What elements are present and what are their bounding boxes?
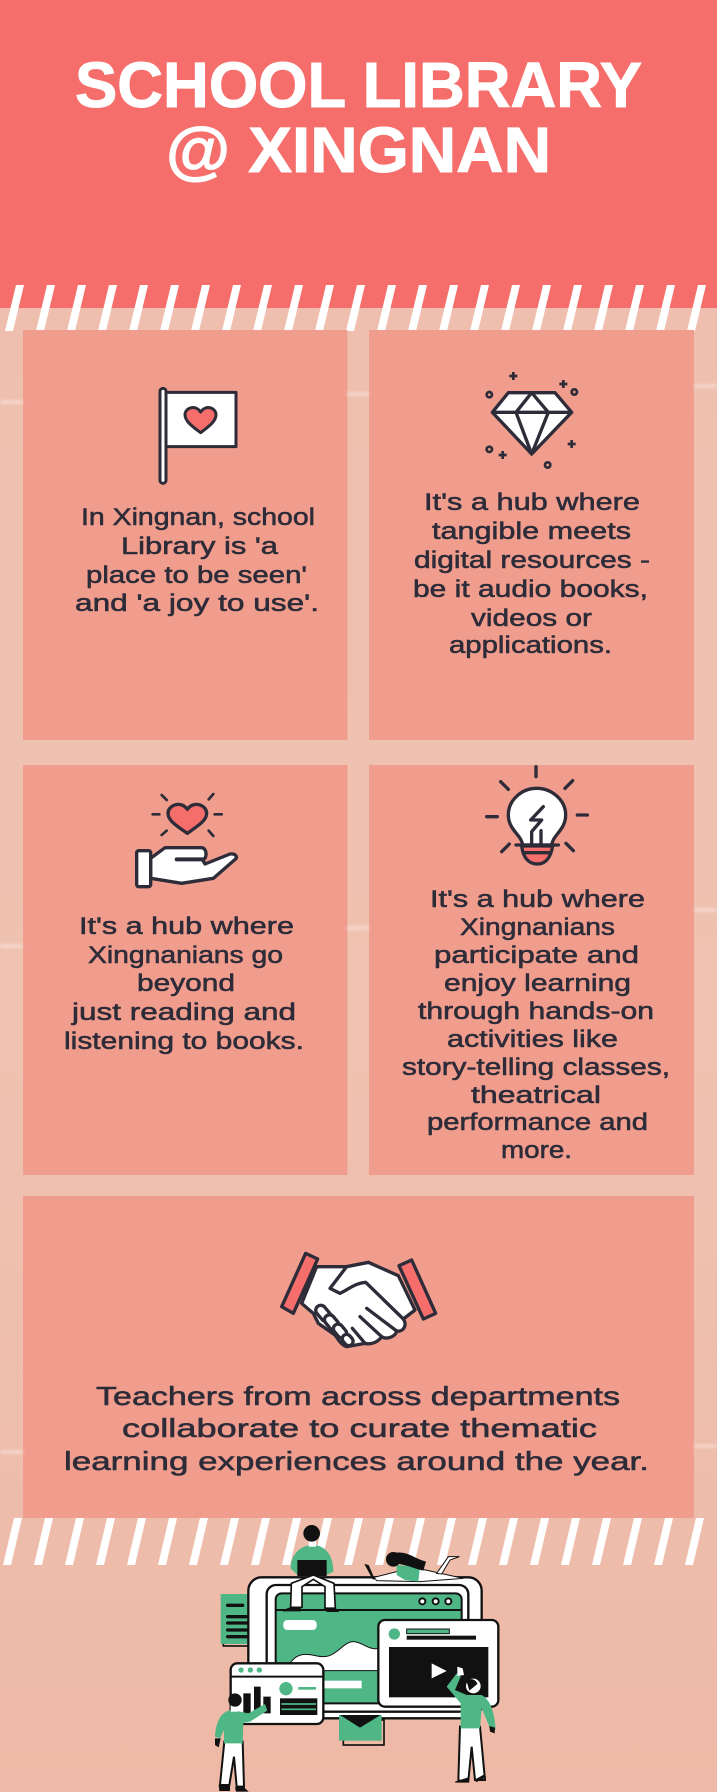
- text: hands-on activities: more.: [501, 1137, 572, 1164]
- text: tangible meets digital: tangible meets: [432, 518, 631, 545]
- text: tangible meets digital: [413, 489, 650, 659]
- icon: diamond with sparkles: [487, 372, 577, 468]
- text: beyond reading: listening to books.: [64, 1028, 304, 1055]
- text: teacher collaboration: collaborate to curate thematic: [122, 1413, 597, 1443]
- person pointing at video: [447, 1667, 496, 1783]
- panel: hands-on activities: [369, 765, 694, 1175]
- text: school library statement: and 'a joy to use'.: [75, 590, 319, 617]
- text: tangible meets digital: It's a hub where: [424, 489, 640, 516]
- text: teacher collaboration: [64, 1381, 649, 1476]
- person sitting with laptop: [282, 1525, 339, 1612]
- text: school library statement: place to be seen': [86, 562, 307, 589]
- title: [75, 49, 642, 186]
- text: hands-on activities: performance and: [427, 1109, 648, 1136]
- icon: light bulb: [487, 767, 587, 864]
- panel: tangible meets digital: [369, 330, 694, 740]
- title: SCHOOL LIBRARY: [75, 49, 642, 121]
- text: tangible meets digital: be it audio books,: [413, 576, 648, 603]
- text: beyond reading: It's a hub where: [79, 913, 294, 940]
- icon: flag with heart: [160, 388, 236, 483]
- text: hands-on activities: [402, 886, 670, 1164]
- text: beyond reading: beyond: [137, 970, 235, 997]
- text: hands-on activities: through hands-on: [418, 998, 654, 1025]
- text: hands-on activities: activities like: [447, 1026, 618, 1053]
- main browser window: [248, 1577, 482, 1718]
- illustration: people around web screens: [215, 1525, 498, 1792]
- person lying with laptop: [364, 1552, 463, 1582]
- text: beyond reading: [64, 913, 304, 1055]
- title: @ XINGNAN: [166, 114, 551, 186]
- document: [221, 1594, 260, 1646]
- text: hands-on activities: It's a hub where: [430, 886, 645, 913]
- chart window: [231, 1663, 323, 1724]
- text: school library statement: Library is 'a: [121, 533, 279, 560]
- text: hands-on activities: theatrical: [471, 1082, 601, 1109]
- panel: school library statement: [23, 330, 348, 740]
- text: tangible meets digital: videos or: [471, 605, 592, 632]
- icon: handshake: [282, 1253, 436, 1347]
- text: hands-on activities: participate and: [434, 942, 639, 969]
- text: school library statement: [75, 504, 319, 617]
- text: beyond reading: just reading and: [71, 999, 296, 1026]
- text: school library statement: In Xingnan, school: [81, 504, 315, 531]
- panel: beyond reading: [23, 765, 348, 1175]
- panel: teacher collaboration: [23, 1196, 694, 1518]
- video window: [378, 1620, 498, 1707]
- person pointing at chart: [215, 1693, 267, 1792]
- text: hands-on activities: enjoy learning: [444, 970, 631, 997]
- header band: [0, 0, 717, 308]
- envelope: [339, 1715, 384, 1745]
- text: teacher collaboration: Teachers from across departments: [96, 1381, 620, 1411]
- text: tangible meets digital: digital resources -: [414, 547, 650, 574]
- text: hands-on activities: Xingnanians: [460, 914, 615, 941]
- text: teacher collaboration: learning experiences around the year.: [64, 1446, 649, 1476]
- text: tangible meets digital: applications.: [449, 632, 612, 659]
- icon: hand holding heart: [137, 794, 236, 887]
- text: beyond reading: Xingnanians go: [88, 942, 283, 969]
- text: hands-on activities: story-telling classes,: [402, 1054, 670, 1081]
